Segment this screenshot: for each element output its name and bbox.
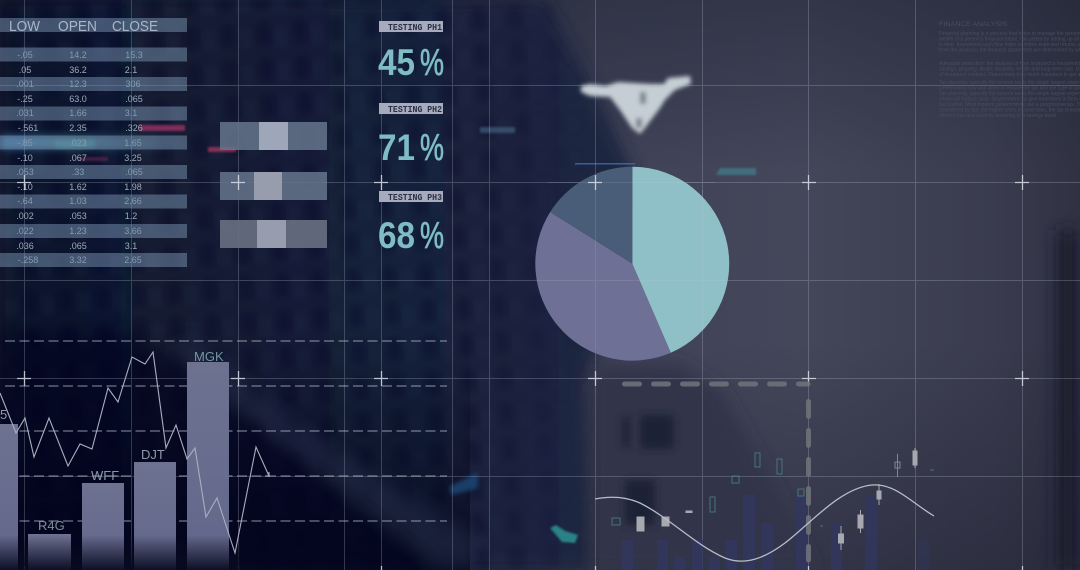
testing phase 1 stat: % [420, 42, 444, 83]
bar labels: MGK [194, 349, 224, 364]
table values: 1.03 [69, 196, 87, 206]
table values: .065 [69, 241, 87, 251]
table header: OPEN [58, 19, 97, 35]
bar: first [0, 424, 18, 570]
table values: .33 [72, 167, 84, 177]
table values: 14.2 [69, 50, 87, 60]
table values: .067 [69, 153, 87, 163]
table header: CLOSE [112, 19, 158, 35]
line chart with arrow [0, 352, 270, 553]
pie chart [535, 167, 729, 361]
table values: .065 [125, 94, 143, 104]
pie grid overlay [537, 176, 727, 350]
dashed guide lines [5, 341, 447, 521]
faint financial analysis text: which it can and used by receiving of a savings bond. [939, 113, 1057, 119]
table values: -.05 [17, 50, 33, 60]
table values: 3.66 [124, 226, 142, 236]
segmented bar 2 [220, 172, 327, 200]
grid crosshair markers [17, 175, 1029, 570]
testing phase 2 stat: % [420, 127, 444, 168]
table values: 1.23 [69, 226, 87, 236]
bar: R4G [28, 534, 71, 570]
table values: .022 [16, 226, 34, 236]
segmented bar 1 [220, 122, 327, 150]
faint financial analysis text: of insurance contract. Determining how much insurance to get at [939, 72, 1080, 78]
table values: 3.1 [125, 108, 137, 118]
table values: 3.1 [125, 241, 137, 251]
bar labels: WFF [91, 468, 119, 483]
table values: 2.65 [124, 255, 142, 265]
bar labels: R4G [38, 518, 65, 533]
testing phase 3 stat: TESTING PH3 [388, 192, 442, 203]
table values: -.85 [17, 138, 33, 148]
table values: .05 [19, 65, 31, 75]
table values: .001 [16, 79, 34, 89]
segmented bars [220, 122, 327, 248]
table values: .036 [16, 241, 34, 251]
smooth curve [595, 485, 934, 561]
table values: 306 [125, 79, 141, 89]
table values: -.64 [17, 196, 33, 206]
table values: 1.66 [69, 108, 87, 118]
drone silhouette [581, 76, 691, 134]
pie slice: teal [632, 167, 729, 353]
table values [16, 50, 143, 265]
table values: 36.2 [69, 65, 87, 75]
pie slice: purple [535, 212, 671, 361]
table values: -.561 [18, 123, 38, 133]
table values: .002 [16, 211, 34, 221]
bar chart [0, 349, 240, 570]
candlesticks [612, 448, 934, 550]
testing phase 2 stat: TESTING PH2 [388, 104, 442, 115]
table values: 63.0 [69, 94, 87, 104]
table values: -.10 [17, 153, 33, 163]
table values: 15.3 [125, 50, 143, 60]
testing phase 3 stat: % [420, 215, 444, 256]
table values: -.258 [18, 255, 38, 265]
bar: WFF [82, 483, 124, 570]
table values: .031 [16, 108, 34, 118]
testing phase 1 stat: TESTING PH1 [388, 22, 442, 33]
testing phase 3 stat [378, 191, 444, 256]
testing phase 1 stat [378, 21, 444, 83]
table values: 3.32 [69, 255, 87, 265]
table values: 1.62 [69, 182, 87, 192]
faint financial analysis text: Adequate protection: the analysis of how to protect a household [939, 61, 1080, 67]
table header [9, 19, 158, 35]
bar labels [0, 349, 224, 533]
table values: .053 [69, 211, 87, 221]
table values: 2.35 [69, 123, 87, 133]
pie slice: slate [550, 167, 632, 264]
faint financial analysis text: considered by tax, the higher one's income rises, the tax is levied [939, 108, 1080, 114]
table values: -.10 [17, 182, 33, 192]
lower right dark bars [622, 495, 929, 570]
faint financial analysis text [939, 21, 1080, 119]
grey candles [637, 448, 917, 550]
table values: 1.2 [125, 211, 137, 221]
table values: 2.66 [124, 196, 142, 206]
bar labels: 5 [0, 407, 7, 422]
thick dashed frame [624, 384, 808, 560]
table values: .053 [16, 167, 34, 177]
table values: 3.25 [124, 153, 142, 163]
testing phase 2 stat: 71 [378, 127, 415, 168]
table values: .065 [125, 167, 143, 177]
faint financial analysis text: FINANCE ANALYSIS [939, 21, 1008, 28]
table row bands [0, 18, 187, 267]
testing phase 2 stat [378, 103, 444, 168]
testing phase 3 stat: 68 [378, 215, 415, 256]
table values: -.25 [17, 94, 33, 104]
data table [0, 18, 187, 267]
table values: .023 [69, 138, 87, 148]
bar: DJT [134, 462, 176, 570]
testing phase 1 stat: 45 [378, 42, 415, 83]
table values: 1.65 [124, 138, 142, 148]
table values: .326 [125, 123, 143, 133]
table values: 12.3 [69, 79, 87, 89]
table values: 2.1 [125, 65, 137, 75]
table header: LOW [9, 19, 40, 35]
glitch: colour streaks [0, 125, 756, 543]
bar labels: DJT [141, 447, 165, 462]
table values: 1.98 [124, 182, 142, 192]
teal outlined candles [612, 453, 934, 526]
bar: MGK [187, 362, 229, 570]
segmented bar 3 [220, 220, 327, 248]
